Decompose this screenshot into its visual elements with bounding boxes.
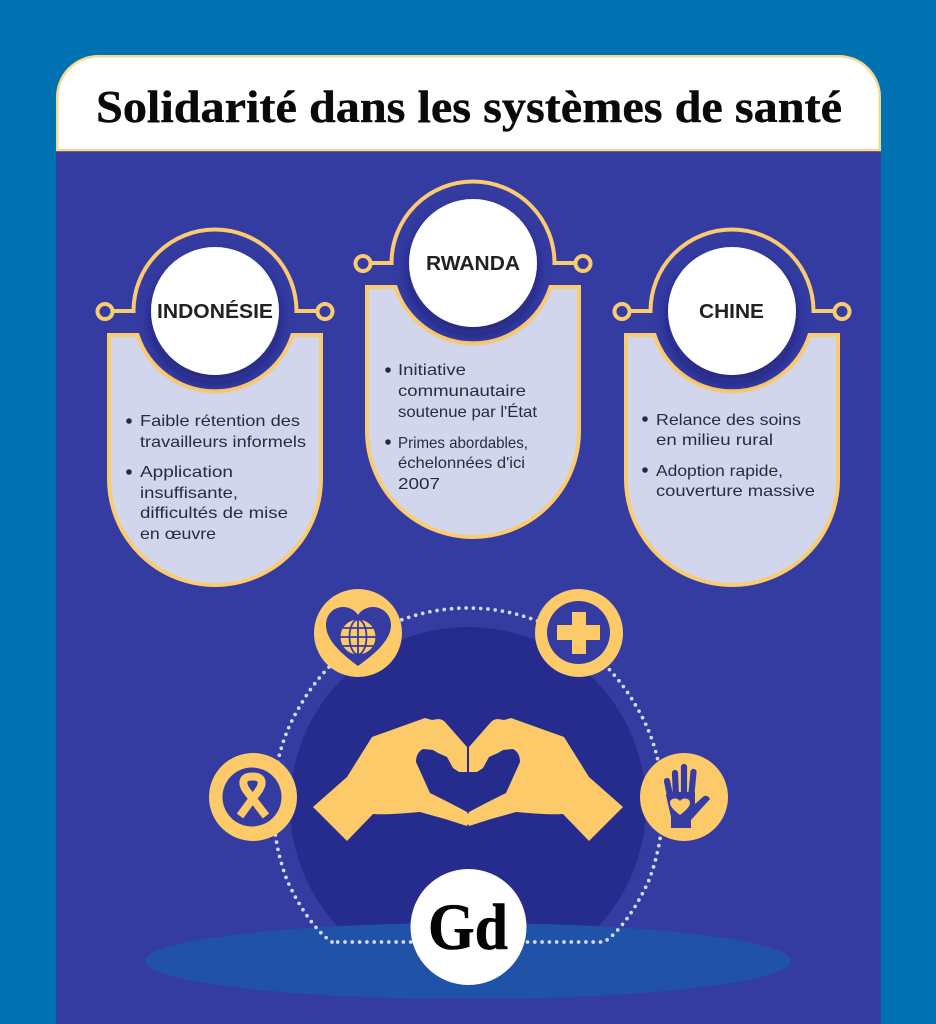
country badge: [668, 247, 796, 375]
country badge: RWANDA: [426, 253, 520, 275]
right hand: [466, 718, 623, 841]
bullet list: 2007: [398, 476, 440, 493]
bullet list: travailleurs informels: [140, 434, 306, 451]
icon: heart hands: [313, 718, 623, 841]
bullet list: Relance des soins: [656, 412, 801, 429]
dotted ring: [273, 608, 663, 942]
connector arch: [356, 182, 590, 271]
country badge: [151, 247, 279, 375]
bullet list: en milieu rural: [656, 432, 773, 449]
bullet list: Application: [140, 464, 233, 481]
bullet list: en œuvre: [140, 526, 216, 543]
icon: heart and globe: [314, 589, 402, 677]
bullet list: Primes abordables,: [398, 435, 528, 452]
card shape: [626, 335, 838, 585]
logo: Gd: [428, 891, 508, 964]
ground ellipse: [145, 923, 791, 999]
panel: Indonésie: [98, 230, 332, 585]
bullet list: soutenue par l'État: [398, 402, 538, 421]
logo: [410, 869, 526, 985]
bullet list: difficultés de mise: [140, 505, 288, 522]
bullet list: [642, 412, 815, 500]
card shape: [109, 335, 321, 585]
card shape: [367, 287, 579, 537]
bullet list: Initiative: [398, 362, 466, 379]
country badge: INDONÉSIE: [157, 300, 273, 323]
icon: ribbon: [209, 753, 297, 841]
panel: Chine: [614, 230, 850, 585]
icon: hand with heart: [640, 753, 728, 841]
backdrop circle: [290, 627, 646, 983]
bullet list: couverture massive: [656, 483, 815, 500]
title banner: [57, 56, 880, 150]
main panel: [56, 100, 881, 1024]
country badge: CHINE: [699, 301, 764, 323]
panel: Rwanda: [356, 182, 590, 537]
bullet list: [385, 362, 538, 493]
icon: plus: [535, 589, 623, 677]
bullet list: Adoption rapide,: [656, 463, 783, 480]
bullet list: échelonnées d'ici: [398, 455, 525, 472]
left hand: [313, 718, 470, 841]
country badge: [409, 199, 537, 327]
bullet list: insuffisante,: [140, 485, 238, 502]
title: Solidarité dans les systèmes de santé: [96, 82, 842, 132]
bullet list: communautaire: [398, 383, 526, 400]
connector arch: [614, 230, 850, 319]
connector arch: [98, 230, 332, 319]
bullet list: [126, 413, 306, 543]
bullet list: Faible rétention des: [140, 413, 300, 430]
